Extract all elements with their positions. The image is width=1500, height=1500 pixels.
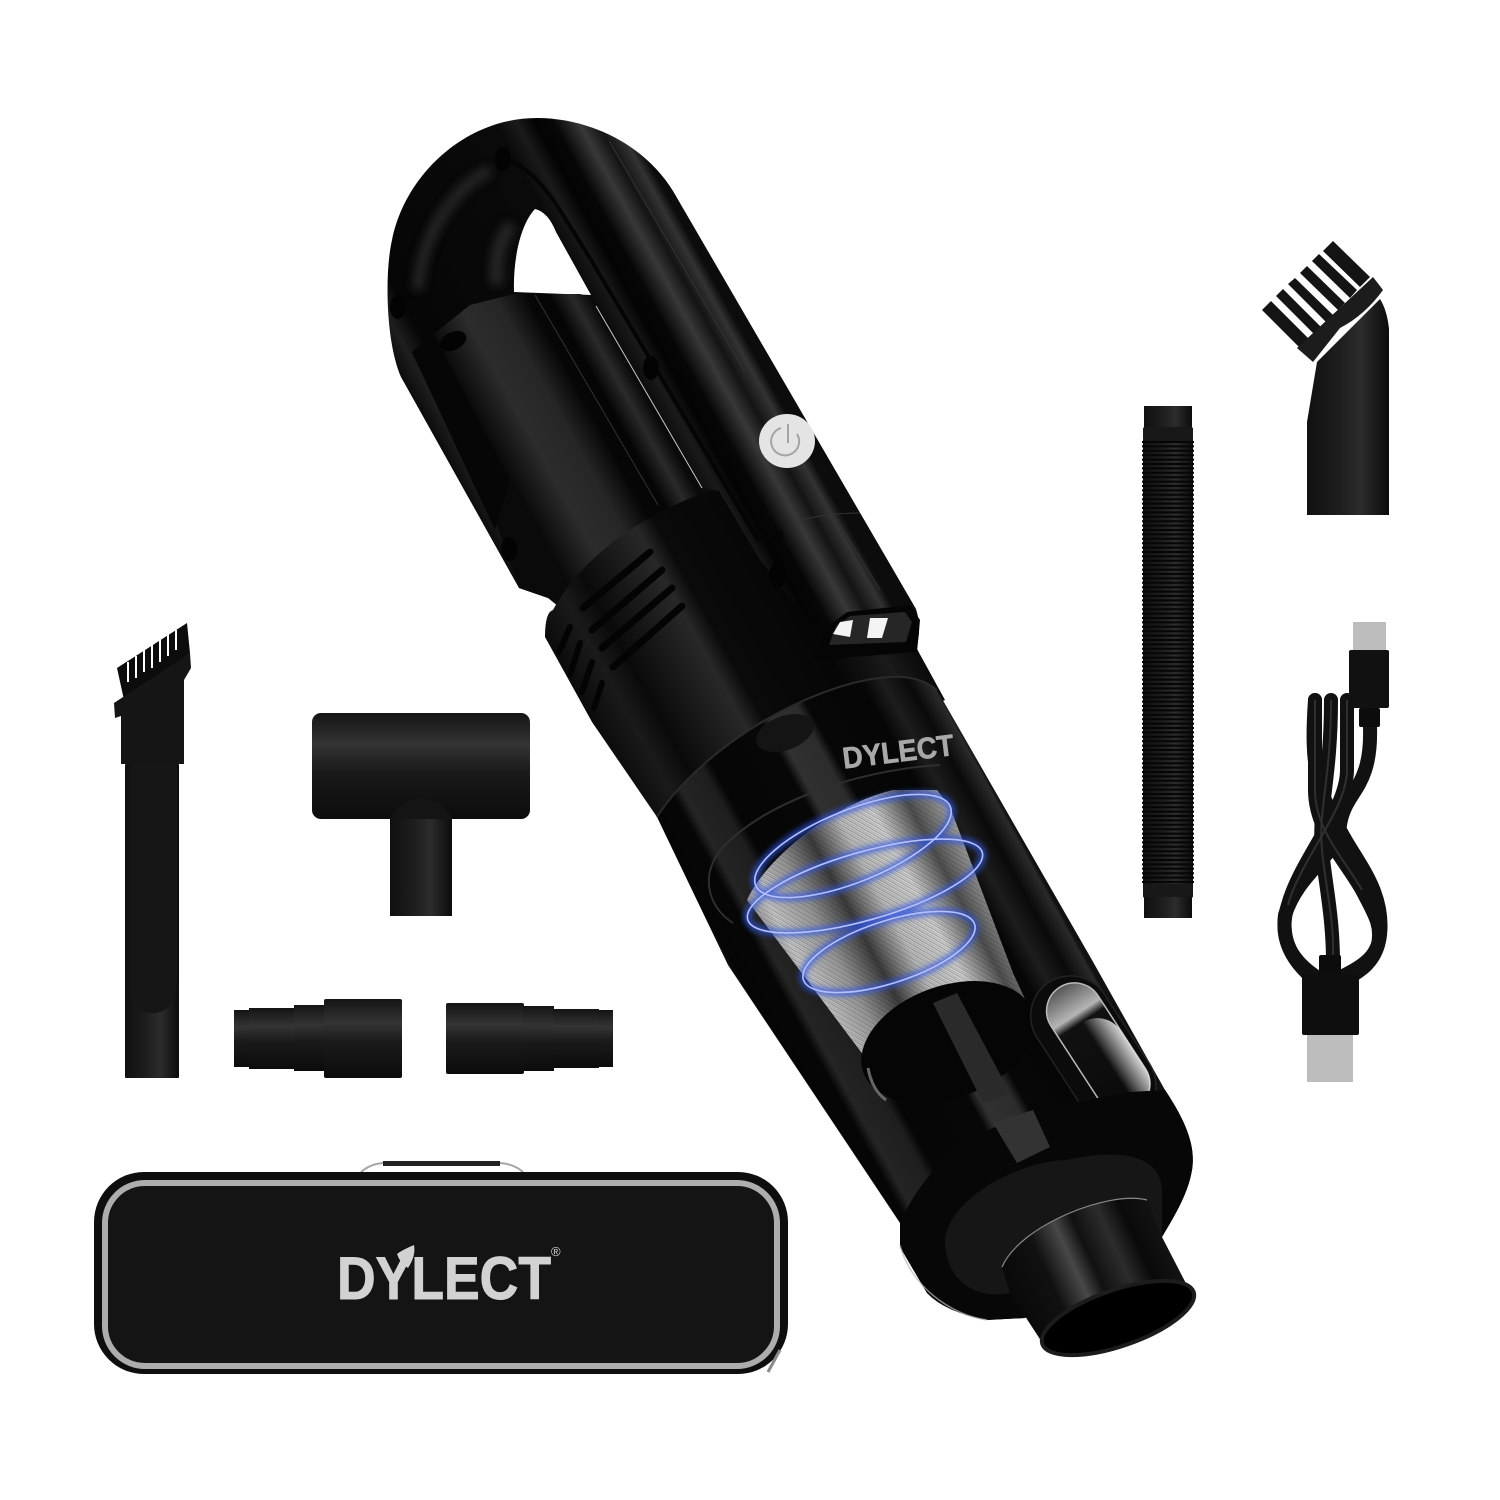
brush collar	[1297, 277, 1383, 362]
USB-C plug	[1353, 622, 1386, 652]
USB-A housing	[1302, 974, 1359, 1035]
hose caps	[1144, 406, 1192, 430]
cable highlights	[1288, 700, 1362, 955]
latch recess	[1015, 961, 1171, 1141]
hose body	[1143, 440, 1193, 886]
vacuum cleaner	[388, 118, 1203, 1371]
base highlight	[868, 1068, 886, 1100]
power button	[759, 414, 815, 468]
cup rim	[657, 677, 937, 817]
nozzle head	[312, 713, 530, 819]
inner dark ring	[709, 765, 940, 923]
LED lights	[833, 618, 888, 638]
zipper pull	[768, 1350, 780, 1372]
case body	[94, 1172, 788, 1374]
LED lens	[829, 612, 912, 645]
cup gauge mark	[751, 707, 819, 759]
storage case	[94, 1161, 788, 1374]
slider latch	[1036, 972, 1161, 1123]
hose top band	[1143, 427, 1193, 441]
bristles	[1262, 241, 1370, 348]
hose bottom cap	[1144, 897, 1192, 918]
cable loops	[1284, 700, 1381, 980]
crevice tongue	[130, 764, 177, 1013]
case handle	[361, 1161, 523, 1172]
base edge highlight	[900, 1245, 987, 1320]
right reducer adapter	[446, 1003, 613, 1074]
handle	[388, 118, 919, 656]
flexible hose	[1143, 406, 1193, 918]
nozzle neck	[390, 790, 452, 916]
nozzle rim	[1002, 1198, 1147, 1267]
registered mark: ®	[551, 1244, 561, 1259]
base ring	[900, 1090, 1193, 1320]
base highlight band	[993, 1110, 1050, 1163]
screws	[390, 147, 787, 588]
left reducer adapter	[234, 999, 402, 1078]
crevice bristles	[117, 623, 190, 700]
nozzle shoulder	[945, 1154, 1162, 1294]
handle inner shading	[418, 170, 512, 290]
light slit	[596, 306, 702, 488]
crevice shaft	[125, 764, 179, 1078]
mesh filter	[747, 790, 1030, 1060]
case logo: DYLECT	[337, 1245, 551, 1312]
USB-C strain relief	[1359, 708, 1380, 727]
filter base	[844, 959, 1052, 1125]
nozzle	[1002, 1198, 1193, 1350]
hose bottom band	[1143, 884, 1193, 898]
hose ribs	[1142, 441, 1194, 885]
neck arch	[390, 799, 452, 819]
LED lamp	[814, 605, 920, 660]
collar ribs	[559, 627, 602, 708]
battery end plate	[412, 334, 510, 530]
battery column	[412, 294, 800, 640]
crevice head	[114, 653, 191, 764]
main collar	[545, 491, 945, 817]
USB-A plug	[1307, 1035, 1353, 1082]
vent slots	[583, 552, 682, 667]
USB-C housing	[1349, 650, 1389, 708]
handle inner rim	[503, 158, 783, 540]
brush neck	[1307, 299, 1389, 515]
dust cup	[657, 677, 1193, 1320]
nozzle opening	[1033, 1265, 1203, 1371]
filter base reflection	[933, 993, 1010, 1103]
USB charging cable	[1284, 622, 1389, 1082]
angled brush attachment	[1262, 241, 1389, 515]
T-shaped upholstery nozzle	[312, 713, 530, 916]
seam lines	[535, 141, 880, 590]
logo leaf	[397, 1245, 414, 1268]
USB-A strain relief	[1319, 955, 1341, 975]
airflow rings	[738, 773, 992, 1009]
crevice bristle gaps	[128, 630, 176, 682]
crevice brush tool	[114, 623, 191, 1078]
silver trim	[105, 1183, 777, 1366]
cup logo: DYLECT	[841, 729, 956, 776]
